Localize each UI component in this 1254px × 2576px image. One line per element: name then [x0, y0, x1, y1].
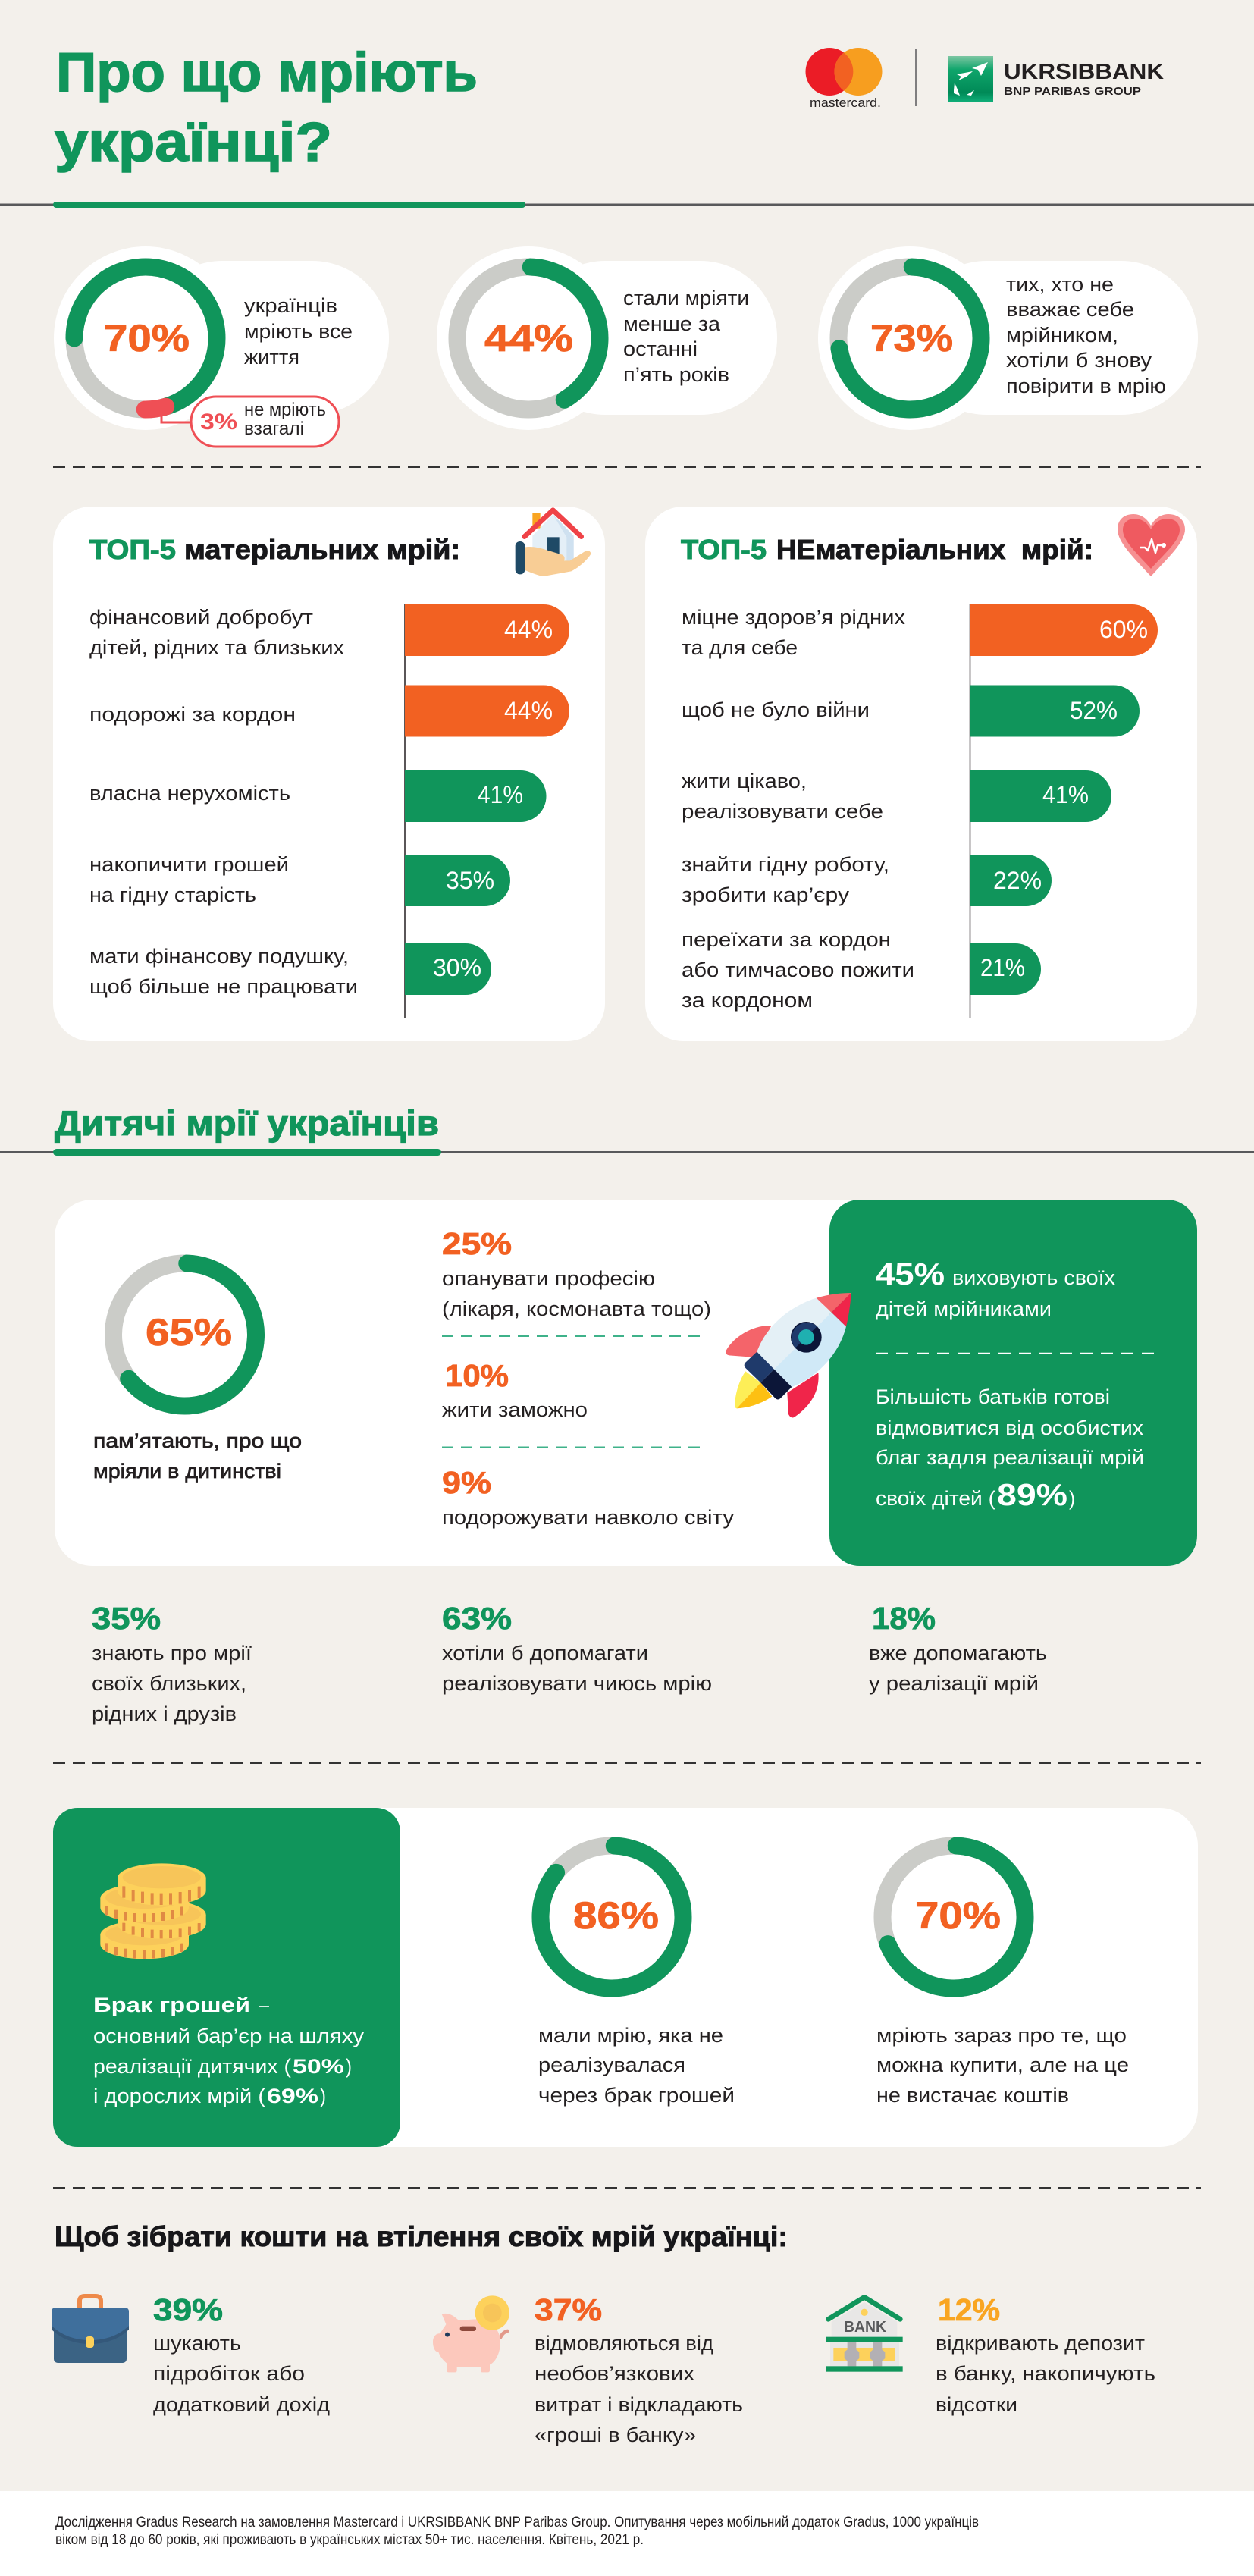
stat: 70% dream — [54, 246, 389, 447]
callout: 3% do not dream: не мріють — [244, 400, 326, 420]
label: interesting life: жити цікаво, — [682, 770, 807, 792]
stat: 73% non-dreamers: повірити в мрію — [1006, 375, 1166, 397]
footer: source note: віком від 18 до 60 років, які проживають в українських містах 50+ тис. населення. Квітень, 2021 р. — [55, 2532, 644, 2548]
stat: 12% deposit: відкривають депозит — [936, 2332, 1145, 2355]
green callout: lack of money: 69% — [267, 2085, 318, 2107]
callout: 3% do not dream — [57, 249, 339, 447]
panel: parents raise dreamers: Більшість батьків готові — [876, 1385, 1110, 1408]
label: career — [682, 853, 889, 906]
panel: money barrier — [53, 1808, 1198, 2147]
label: move abroad: переїхати за кордон — [682, 928, 891, 951]
logo: mastercard: mastercard. — [810, 96, 881, 110]
logo: ukrsibbank — [948, 56, 1164, 102]
stat: 10% wealth — [442, 1358, 588, 1421]
stat: 35% know dreams: 35% — [92, 1601, 161, 1636]
heading: top-5 non-material: НЕматеріальних мрій: — [776, 534, 1093, 565]
label: own property: власна нерухомість — [89, 782, 290, 805]
panel: parents raise dreamers: своїх дітей ( — [876, 1487, 995, 1510]
stat: 18% already help — [869, 1601, 1047, 1695]
icon: house in hand — [516, 510, 591, 576]
panel: parents raise dreamers — [829, 1200, 1197, 1566]
stat: 63% want to help — [442, 1601, 712, 1695]
label: interesting life — [682, 770, 883, 823]
stat: 18% already help: у реалізації мрій — [869, 1672, 1039, 1695]
text: remember childhood dreams — [93, 1429, 302, 1483]
stat: 9% travel — [442, 1465, 735, 1529]
stat: 37% refuse expenses — [535, 2292, 743, 2446]
text: dream of purchases — [876, 2024, 1129, 2107]
bar chart: non-material dreams: 60% — [1099, 616, 1148, 643]
stat: 25% profession: опанувати професію — [442, 1267, 655, 1290]
stat: 63% want to help: 63% — [442, 1601, 512, 1636]
label: financial cushion: щоб більше не працювати — [89, 975, 358, 998]
stat: 25% profession: (лікаря, космонавта тощо) — [442, 1297, 711, 1320]
panel: top-5 material dreams — [53, 507, 605, 1041]
stat: 25% profession — [442, 1226, 711, 1320]
label: savings for old age — [89, 853, 289, 906]
bar chart: material dreams: 30% — [433, 954, 481, 981]
green callout: lack of money: Брак грошей — [93, 1994, 250, 2016]
stat: 44% dream less: стали мріяти — [623, 287, 749, 309]
label: financial wellbeing: фінансовий добробут — [89, 606, 313, 629]
green callout: lack of money: ) — [346, 2055, 352, 2078]
heading: how Ukrainians save: Щоб зібрати кошти на втілення своїх мрій українці: — [55, 2221, 788, 2252]
stat: 73% non-dreamers: мрійником, — [1006, 324, 1118, 347]
label: savings for old age: накопичити грошей — [89, 853, 289, 876]
text: dream of purchases: мріють зараз про те, що — [876, 2024, 1127, 2047]
heading: childhood dreams: Дитячі мрії українців — [55, 1103, 439, 1143]
bar chart: material dreams: 44% — [504, 697, 553, 724]
heading: top-5 non-material: ТОП-5 — [681, 534, 767, 565]
panel: parents raise dreamers: ) — [1069, 1487, 1075, 1510]
stat: 44% dream less: п’ять років — [623, 363, 729, 386]
chart: 86% unrealised dream — [538, 1843, 685, 1991]
stat: 18% already help: 18% — [872, 1601, 936, 1636]
stat: 9% travel: 9% — [442, 1465, 491, 1500]
label: financial wellbeing — [89, 606, 345, 659]
stat: 12% deposit: в банку, накопичують — [936, 2362, 1155, 2385]
logo: ukrsibbank: BNP PARIBAS GROUP — [1004, 85, 1141, 98]
panel: childhood dreams — [55, 1200, 889, 1566]
green callout: lack of money: 50% — [293, 2055, 344, 2078]
label: no war: щоб не було війни — [682, 698, 870, 721]
stat: 44% dream less — [437, 246, 777, 430]
stat: 10% wealth: жити заможно — [442, 1398, 588, 1421]
logo: ukrsibbank: UKRSIBBANK — [1004, 60, 1164, 84]
stat: 73% non-dreamers: 73% — [870, 317, 953, 359]
stat: 39% side job: шукають — [153, 2332, 241, 2355]
footer: source note: Дослідження Gradus Research на замовлення Mastercard і UKRSIBBANK BNP Paribas Group. Опитування через мобільний додаток Gradus, 1000 українців — [55, 2515, 979, 2531]
stat: 35% know dreams: своїх близьких, — [92, 1672, 246, 1695]
icon: bank: BANK — [844, 2319, 887, 2336]
label: health: міцне здоров’я рідних — [682, 606, 906, 629]
stat: 39% side job: додатковий дохід — [153, 2393, 330, 2416]
stat: 44% dream less: менше за — [623, 312, 721, 335]
stat: 35% know dreams: рідних і друзів — [92, 1702, 237, 1725]
title: Про що мріють — [56, 42, 478, 103]
title: українці? — [55, 112, 332, 173]
label: financial cushion — [89, 945, 358, 998]
stat: 63% want to help: хотіли б допомагати — [442, 1642, 648, 1665]
bar chart: non-material dreams: 52% — [1070, 697, 1118, 724]
icon: heart with pulse — [1118, 514, 1185, 576]
stat: 12% deposit — [936, 2292, 1155, 2416]
stat: 39% side job — [153, 2292, 330, 2416]
panel: parents raise dreamers: відмовитися від особистих — [876, 1417, 1144, 1439]
panel: parents raise dreamers: благ задля реалізації мрій — [876, 1446, 1144, 1469]
panel: parents raise dreamers: 45% — [876, 1257, 945, 1291]
stat: 9% travel: подорожувати навколо світу — [442, 1506, 735, 1529]
green callout: lack of money: і дорослих мрій ( — [93, 2085, 265, 2107]
label: health — [682, 606, 906, 659]
green callout: lack of money: – — [259, 1994, 269, 2016]
bar chart: material dreams: 35% — [446, 867, 494, 894]
stat: 73% non-dreamers: вважає себе — [1006, 298, 1134, 321]
stat: 35% know dreams: знають про мрії — [92, 1642, 252, 1665]
chart: 70% dream of purchases — [880, 1843, 1027, 1991]
stat: 70% dream: українців — [244, 294, 337, 317]
chart: 65% remember — [111, 1261, 259, 1408]
icon: coins — [100, 1863, 206, 1959]
label: move abroad: або тимчасово пожити — [682, 959, 914, 981]
icon: piggy bank — [433, 2295, 509, 2372]
callout: 3% do not dream: 3% — [200, 409, 237, 435]
panel: top-5 non-material dreams — [645, 507, 1197, 1041]
stat: 12% deposit: 12% — [938, 2292, 1000, 2327]
stat: 10% wealth: 10% — [445, 1358, 509, 1393]
chart: 86% unrealised dream: 86% — [573, 1894, 659, 1937]
panel: parents raise dreamers: 89% — [997, 1477, 1067, 1512]
stat: 35% know dreams — [92, 1601, 252, 1725]
label: move abroad — [682, 928, 914, 1012]
bar chart: non-material dreams: 21% — [980, 954, 1025, 981]
text: dream of purchases: не вистачає коштів — [876, 2084, 1069, 2107]
stat: 73% non-dreamers — [818, 246, 1198, 430]
stat: 12% deposit: відсотки — [936, 2393, 1017, 2416]
icon: briefcase — [52, 2296, 129, 2363]
stat: 73% non-dreamers: хотіли б знову — [1006, 349, 1152, 372]
label: travel abroad: подорожі за кордон — [89, 703, 296, 726]
bar chart: material dreams: 41% — [478, 781, 523, 808]
green callout: lack of money: реалізації дитячих ( — [93, 2055, 291, 2078]
text: dream of purchases: можна купити, але на це — [876, 2054, 1129, 2076]
stat: 44% dream less: 44% — [484, 317, 573, 359]
bar chart: non-material dreams: 41% — [1042, 781, 1089, 808]
text: remember childhood dreams: пам’ятають, про що — [93, 1429, 302, 1452]
logo: mastercard — [805, 48, 883, 110]
text: unrealised dream: мали мрію, яка не — [538, 2024, 723, 2047]
label: career: зробити кар’єру — [682, 883, 850, 906]
stat: 25% profession: 25% — [442, 1226, 512, 1261]
stat: 37% refuse expenses: необов’язкових — [535, 2362, 695, 2385]
label: move abroad: за кордоном — [682, 989, 813, 1012]
label: financial cushion: мати фінансову подушку, — [89, 945, 349, 968]
stat: 70% dream: життя — [244, 346, 299, 369]
stat: 70% dream: 70% — [104, 317, 190, 359]
green callout: lack of money: ) — [320, 2085, 326, 2107]
green callout: lack of money: основний бар’єр на шляху — [93, 2025, 365, 2047]
stat: 73% non-dreamers: тих, хто не — [1006, 273, 1114, 296]
stat: 44% dream less: останні — [623, 337, 698, 360]
text: remember childhood dreams: мріяли в дитинстві — [93, 1460, 281, 1483]
stat: 37% refuse expenses: 37% — [535, 2292, 602, 2327]
icon: bank — [826, 2297, 903, 2372]
stat: 37% refuse expenses: відмовляються від — [535, 2332, 713, 2355]
panel: parents raise dreamers: дітей мрійниками — [876, 1297, 1052, 1320]
label: health: та для себе — [682, 636, 798, 659]
green callout: lack of money — [53, 1808, 400, 2147]
callout: 3% do not dream: взагалі — [244, 419, 304, 439]
stat: 39% side job: підробіток або — [153, 2362, 305, 2385]
label: interesting life: реалізовувати себе — [682, 800, 883, 823]
stat: 63% want to help: реалізовувати чиюсь мрію — [442, 1672, 712, 1695]
bar chart: material dreams: 44% — [504, 616, 553, 643]
chart: 65% remember: 65% — [146, 1311, 232, 1354]
stat: 37% refuse expenses: витрат і відкладають — [535, 2393, 743, 2416]
bar chart: material dreams — [405, 604, 569, 1018]
stat: 39% side job: 39% — [153, 2292, 223, 2327]
label: financial wellbeing: дітей, рідних та близьких — [89, 636, 345, 659]
stat: 70% dream: мріють все — [244, 320, 353, 343]
footer: source note — [0, 2491, 1254, 2576]
title — [55, 42, 478, 173]
heading: top-5 material: ТОП-5 — [89, 534, 176, 565]
label: savings for old age: на гідну старість — [89, 883, 256, 906]
icon: rocket — [726, 1293, 851, 1417]
text: unrealised dream: реалізувалася — [538, 2054, 685, 2076]
bar chart: non-material dreams — [970, 604, 1158, 1018]
label: career: знайти гідну роботу, — [682, 853, 889, 876]
stat: 37% refuse expenses: «гроші в банку» — [535, 2424, 696, 2446]
panel: parents raise dreamers: виховують своїх — [952, 1266, 1116, 1289]
heading: top-5 material: матеріальних мрій: — [184, 534, 460, 565]
text: unrealised dream — [538, 2024, 735, 2107]
chart: 70% dream of purchases: 70% — [915, 1894, 1001, 1937]
text: unrealised dream: через брак грошей — [538, 2084, 735, 2107]
stat: 18% already help: вже допомагають — [869, 1642, 1047, 1665]
bar chart: non-material dreams: 22% — [993, 867, 1042, 894]
